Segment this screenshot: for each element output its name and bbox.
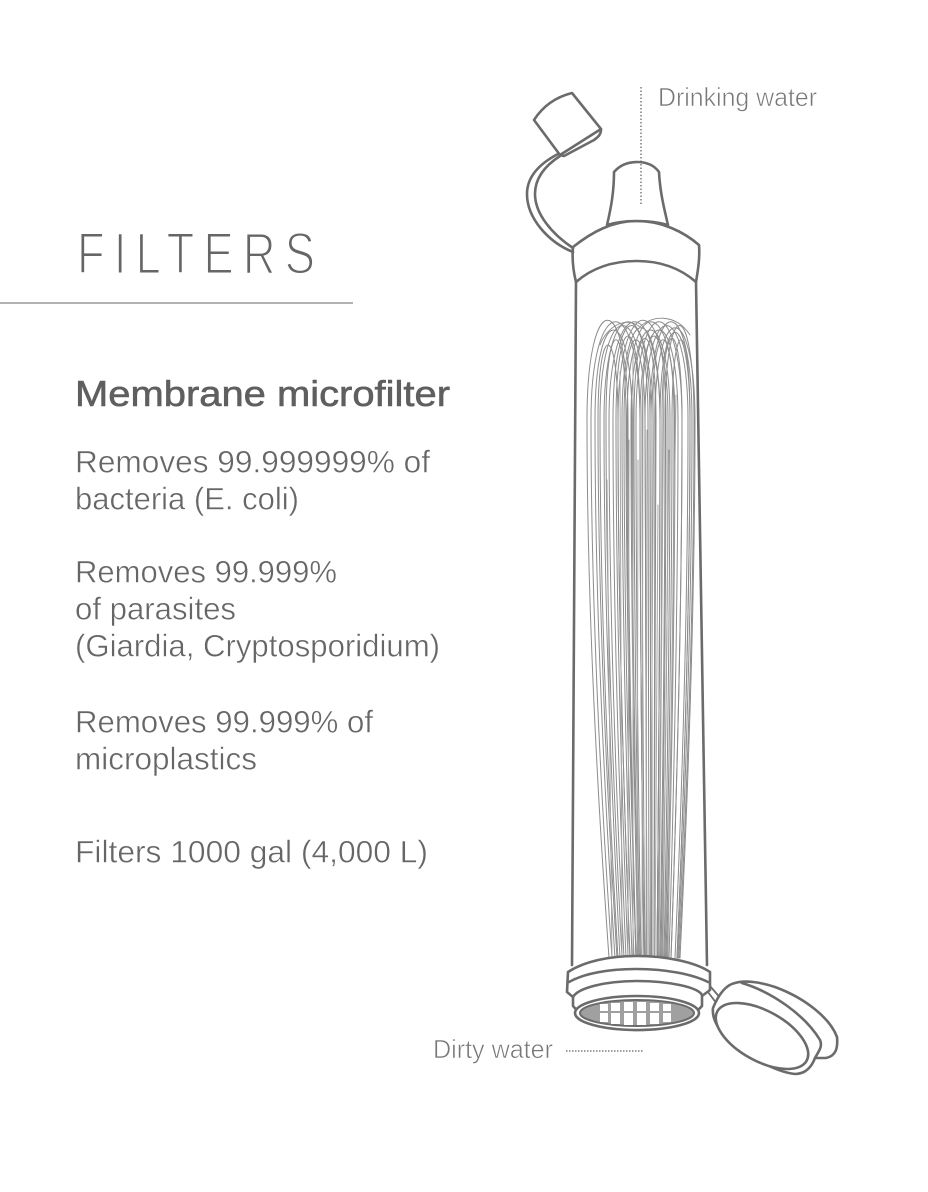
label: drinking water: Drinking water [658, 82, 817, 112]
bottom cap strap [708, 986, 722, 1004]
text block: specifications: Removes 99.999% of [75, 704, 373, 740]
membrane fibers [587, 318, 695, 958]
title: FILTERS [77, 222, 315, 287]
text block: specifications: bacteria (E. coli) [75, 480, 299, 516]
text block: specifications: Filters 1000 gal (4,000 L) [75, 834, 428, 870]
dotted line: dirty water [566, 1050, 643, 1052]
top collar [573, 221, 699, 282]
heading: membrane microfilter: Membrane microfilter [75, 373, 450, 414]
cap strap [527, 154, 573, 252]
bottom cap [705, 982, 837, 1083]
illustration: water filter straw [527, 93, 837, 1083]
text block: specifications [75, 444, 440, 870]
text block: specifications: (Giardia, Cryptosporidium) [75, 628, 440, 664]
text block: specifications: Removes 99.999% [75, 554, 337, 590]
dotted line: drinking water [640, 87, 642, 206]
straw body [572, 282, 707, 965]
top cap [534, 93, 601, 155]
text block: specifications: of parasites [75, 590, 236, 626]
text block: specifications: microplastics [75, 740, 257, 776]
intake mesh [575, 996, 699, 1030]
mouthpiece [607, 162, 668, 225]
bottom collar [567, 956, 710, 1030]
label: dirty water: Dirty water [433, 1034, 553, 1064]
text block: specifications: Removes 99.999999% of [75, 444, 430, 480]
